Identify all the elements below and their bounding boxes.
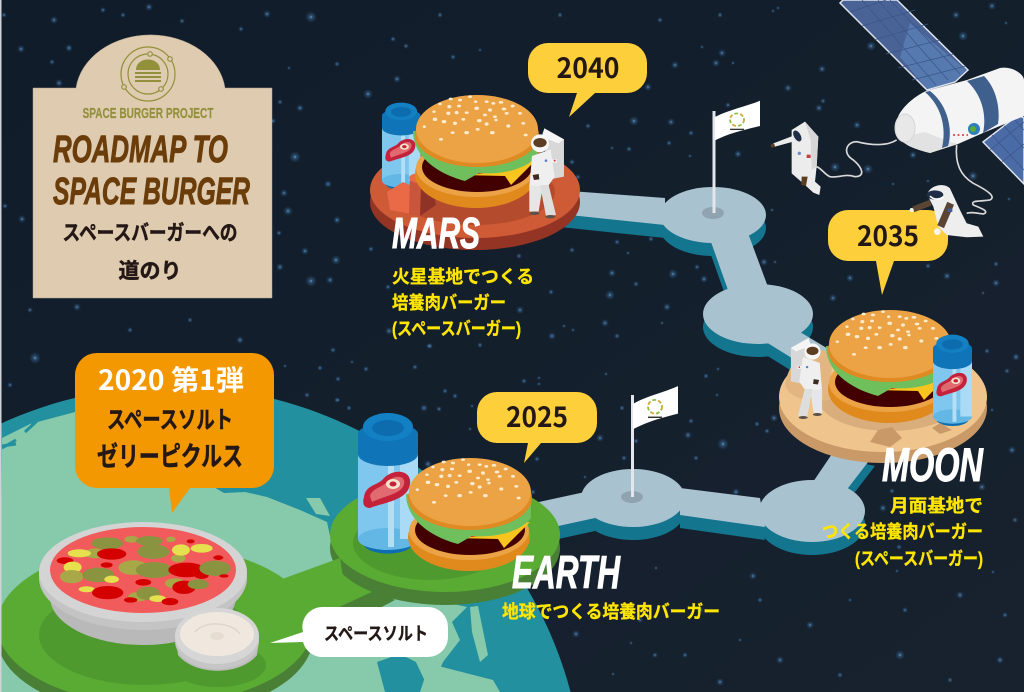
icon: cultured meat can on Earth — [358, 413, 418, 554]
label: Earth: EARTH — [512, 546, 621, 598]
icon: space station — [840, 0, 1024, 184]
label: Earth: 地球でつくる培養肉バーガー — [502, 601, 720, 622]
label: Moon: 月面基地で — [890, 496, 983, 516]
platform: Mars — [370, 142, 580, 250]
subtitle — [62, 222, 238, 283]
icon: Moon rocks — [870, 423, 952, 447]
subtitle: 道のり — [118, 260, 182, 283]
callout: 2020 first release: 2020 第1弾 — [98, 359, 244, 399]
Mars group: can, rocks, burger, astronaut — [382, 95, 564, 218]
platform: Earth — [285, 478, 560, 628]
callout: 2035: 2035 — [857, 215, 919, 255]
label: Mars — [392, 209, 534, 339]
satellite tethers — [817, 140, 992, 214]
flag: road near Earth — [621, 386, 678, 503]
icon: Moon burger — [826, 310, 952, 423]
callout: space salt — [270, 607, 448, 657]
Earth group: can and burger — [358, 413, 532, 571]
roadmap path — [525, 187, 875, 555]
label: Mars: 火星基地でつくる — [392, 267, 534, 287]
callout: 2020 first release: スペースソルト — [107, 407, 233, 434]
panel: title card — [33, 35, 272, 298]
callout: 2040: 2040 — [556, 47, 620, 87]
icon: Earth burger — [406, 458, 532, 571]
icon: project logo — [121, 47, 175, 101]
label: Moon: つくる培養肉バーガー — [822, 521, 983, 542]
icon: astronaut on Mars — [529, 128, 564, 218]
label: Mars: 培養肉バーガー — [392, 292, 506, 313]
callout: space salt: スペースソルト — [324, 624, 428, 644]
icon: floating astronaut right — [910, 185, 983, 237]
icon: Mars rocks — [387, 173, 436, 216]
callout: 2035 — [828, 210, 948, 295]
icon: space salt dish — [175, 608, 259, 671]
label: Moon: (スペースバーガー) — [855, 549, 983, 569]
label: Moon: MOON — [882, 438, 984, 491]
text: project name: SPACE BURGER PROJECT — [82, 105, 214, 122]
earth globe — [0, 386, 571, 692]
label: Earth — [502, 546, 720, 622]
platform: Moon — [779, 342, 987, 463]
callout: 2020 first release — [75, 353, 274, 513]
icon: cultured meat can on Moon — [933, 335, 972, 426]
label: Mars: (スペースバーガー) — [392, 319, 521, 339]
icon: floating astronaut left — [771, 122, 821, 195]
callout: 2025: 2025 — [506, 396, 568, 436]
icon: astronaut on Moon — [791, 338, 822, 419]
title: ROADMAP TO — [53, 129, 228, 171]
icon: Mars burger — [413, 95, 539, 208]
callout: 2040 — [528, 43, 647, 117]
subtitle: スペースバーガーへの — [62, 222, 238, 245]
icon: cultured meat can on Mars — [382, 103, 420, 190]
callout: 2020 first release: ゼリーピクルス — [97, 441, 243, 472]
callout: 2025 — [477, 392, 597, 463]
station body — [897, 68, 1024, 153]
label: Mars: MARS — [392, 209, 480, 258]
solar panel upper — [840, 0, 968, 90]
platform: salt dish green base — [0, 545, 400, 692]
flag: road near Mars — [702, 101, 760, 219]
icon: pickle bowl — [39, 522, 247, 645]
title line two: SPACE BURGER — [53, 171, 250, 213]
Moon group: astronaut, burger, can, rocks — [791, 310, 972, 447]
label: Moon — [822, 438, 984, 569]
solar panel lower — [983, 115, 1024, 184]
